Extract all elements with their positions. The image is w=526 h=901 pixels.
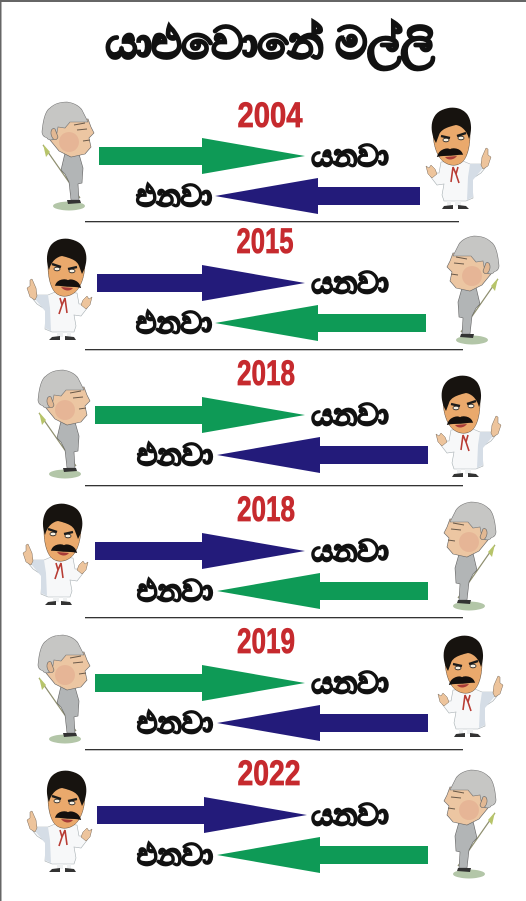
year: 2019: 2019 — [237, 622, 295, 661]
arrow: green going right — [95, 397, 305, 433]
label: going: යනවා — [311, 399, 389, 432]
icon: moustached man, right — [426, 108, 491, 209]
icon: grey-haired man, right — [444, 502, 496, 610]
icon: moustached man, left — [27, 771, 92, 872]
label: going: යනවා — [311, 667, 389, 700]
year: 2004: 2004 — [238, 96, 303, 135]
arrow: blue going right — [97, 797, 307, 833]
panel: 2022 — [27, 754, 496, 878]
arrow: green coming left — [217, 573, 428, 609]
year: 2018: 2018 — [237, 354, 295, 393]
label: going: යනවා — [311, 799, 389, 832]
arrow: green going right — [99, 138, 305, 174]
label: coming: එනවා — [137, 707, 213, 740]
panel: 2019 — [38, 622, 503, 744]
label: going: යනවා — [311, 267, 389, 300]
icon: moustached man, right — [438, 636, 503, 737]
label: coming: එනවා — [136, 307, 212, 340]
icon: grey-haired man, right — [447, 236, 499, 344]
arrow: blue going right — [95, 533, 305, 569]
label: coming: එනවා — [137, 839, 213, 872]
label: coming: එනවා — [136, 180, 212, 213]
icon: moustached man, left — [23, 504, 88, 605]
icon: grey-haired man, left — [38, 635, 90, 744]
label: coming: එනවා — [137, 439, 213, 472]
arrow: green coming left — [215, 305, 426, 341]
panel: 2004 — [42, 96, 491, 214]
year: 2018: 2018 — [237, 490, 295, 529]
icon: grey-haired man, left — [42, 102, 94, 210]
arrow: blue coming left — [217, 705, 428, 741]
icon: moustached man, right — [436, 376, 501, 477]
icon: moustached man, left — [27, 239, 92, 340]
arrow: blue going right — [97, 265, 305, 301]
title: යාළුවොනේ මල්ලි — [106, 19, 435, 70]
label: coming: එනවා — [137, 575, 213, 608]
arrow: blue coming left — [215, 178, 420, 214]
icon: grey-haired man, right — [444, 770, 496, 878]
icon: grey-haired man, left — [38, 370, 90, 478]
arrow: green coming left — [217, 837, 428, 873]
arrow: green going right — [95, 665, 305, 701]
panel: 2018 second — [23, 490, 496, 610]
year: 2022: 2022 — [238, 754, 300, 793]
year: 2015: 2015 — [236, 222, 294, 261]
panel: 2015 — [27, 222, 499, 344]
label: going: යනවා — [311, 140, 389, 173]
panel: 2018 first — [38, 354, 501, 478]
arrow: blue coming left — [217, 437, 428, 473]
label: going: යනවා — [311, 535, 389, 568]
